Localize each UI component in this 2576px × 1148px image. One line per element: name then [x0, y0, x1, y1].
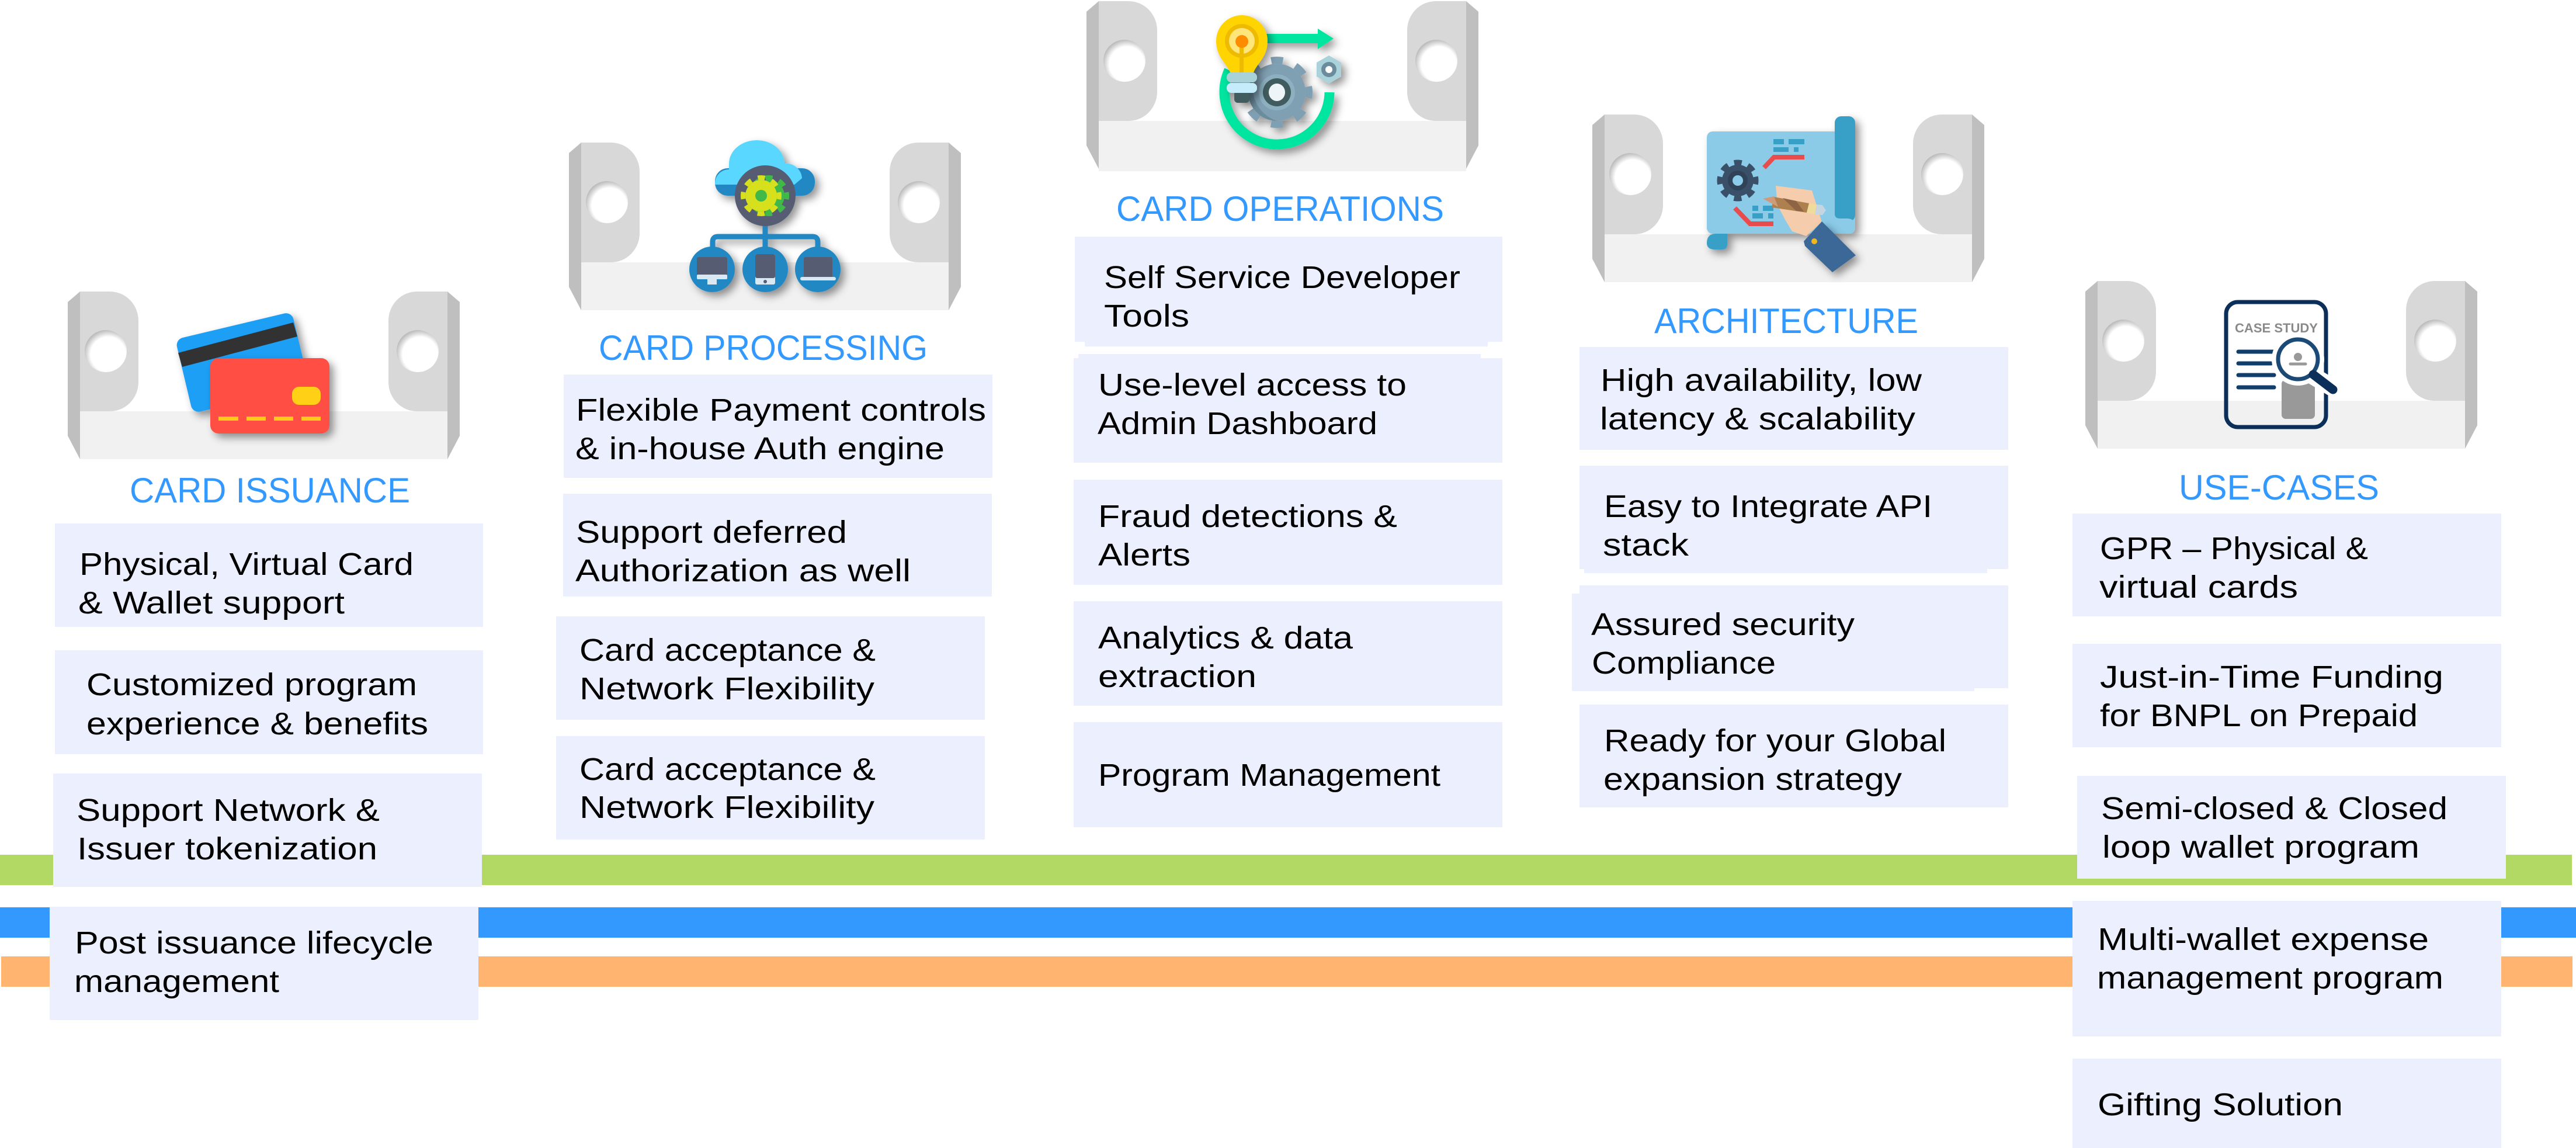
- item: flexible payment controls: [564, 374, 992, 478]
- item: just-in-time funding: for BNPL on Prepaid: [2100, 698, 2418, 733]
- item: global expansion: [1579, 705, 2008, 807]
- item: easy api integration: Easy to Integrate API: [1604, 489, 1932, 524]
- item: developer tools: Self Service Developer: [1104, 260, 1460, 295]
- item: physical, virtual card: [55, 523, 483, 627]
- icon: case study document: [2226, 302, 2333, 427]
- item: deferred authorization: Authorization as well: [575, 553, 911, 588]
- item: admin dashboard: [1074, 354, 1502, 463]
- item: deferred authorization: [563, 494, 992, 596]
- panel: card issuance: [50, 292, 483, 1020]
- icon holder bracket: [1592, 115, 1984, 282]
- item: gpr cards: GPR – Physical &: [2100, 531, 2368, 566]
- icon holder bracket: [569, 143, 961, 310]
- panel: card operations: [1074, 1, 1502, 827]
- item: wallet program: [2077, 776, 2506, 879]
- item: security compliance: [1572, 585, 2008, 691]
- item: card acceptance: [556, 616, 985, 720]
- item: just-in-time funding: [2072, 644, 2501, 747]
- item: tokenization: Support Network &: [77, 793, 380, 828]
- heading: card processing: CARD PROCESSING: [599, 328, 928, 367]
- item: expense management: Multi-wallet expense: [2098, 922, 2429, 957]
- item: gifting solution: Gifting Solution: [2098, 1087, 2343, 1122]
- item: gifting solution: [2072, 1059, 2501, 1148]
- item: high availability: High availability, low: [1601, 363, 1922, 398]
- panel: architecture: [1572, 115, 2008, 807]
- icon holder bracket: [68, 292, 460, 459]
- item: admin dashboard: Use-level access to: [1098, 367, 1407, 403]
- band: green: [0, 855, 2572, 885]
- item: analytics: [1074, 601, 1502, 706]
- heading: card issuance: CARD ISSUANCE: [130, 471, 410, 510]
- item: global expansion: Ready for your Global: [1604, 723, 1946, 758]
- item: customized program: experience & benefits: [86, 706, 428, 741]
- item: card acceptance: Network Flexibility: [579, 671, 874, 706]
- item: developer tools: Tools: [1104, 299, 1189, 334]
- item: card acceptance: Card acceptance &: [579, 633, 876, 668]
- item: high availability: [1579, 347, 2008, 450]
- band: blue: [0, 907, 2576, 938]
- item: expense management: [2072, 901, 2501, 1036]
- item: deferred authorization: Support deferred: [576, 515, 847, 550]
- item: wallet program: Semi-closed & Closed: [2101, 791, 2447, 826]
- item: developer tools: [1075, 237, 1502, 346]
- item: card acceptance repeat: Network Flexibility: [579, 790, 874, 825]
- item: physical, virtual card: & Wallet support: [78, 585, 345, 620]
- icon: credit cards: [175, 311, 329, 433]
- item: flexible payment controls: & in-house Auth engine: [575, 431, 945, 466]
- icon holder bracket: [1086, 1, 1478, 171]
- item: global expansion: expansion strategy: [1603, 762, 1902, 797]
- item: fraud detection: [1074, 480, 1502, 585]
- item: expense management: management program: [2097, 960, 2443, 996]
- item: program management: Program Management: [1098, 758, 1440, 793]
- panel: use-cases: [2072, 281, 2506, 1148]
- item: gpr cards: [2072, 514, 2501, 616]
- panel: card processing: [556, 140, 992, 840]
- item: flexible payment controls: Flexible Payment controls: [576, 393, 986, 428]
- item: tokenization: Issuer tokenization: [77, 831, 377, 866]
- heading: architecture: ARCHITECTURE: [1654, 301, 1918, 341]
- item: physical, virtual card: Physical, Virtual Card: [79, 547, 414, 582]
- item: analytics: extraction: [1098, 659, 1256, 694]
- icon: cloud network: [689, 140, 841, 292]
- item: easy api integration: stack: [1603, 528, 1689, 563]
- item: lifecycle management: Post issuance lifecycle: [75, 925, 433, 960]
- item: security compliance: Compliance: [1592, 646, 1776, 681]
- item: program management: [1074, 722, 1502, 827]
- item: gpr cards: virtual cards: [2099, 570, 2298, 605]
- item: admin dashboard: Admin Dashboard: [1098, 406, 1377, 441]
- item: security compliance: Assured security: [1591, 607, 1855, 642]
- item: lifecycle management: management: [74, 964, 279, 999]
- item: wallet program: loop wallet program: [2102, 830, 2419, 865]
- item: customized program: [55, 650, 483, 754]
- item: customized program: Customized program: [86, 667, 417, 702]
- item: tokenization: [53, 774, 482, 887]
- item: analytics: Analytics & data: [1098, 620, 1353, 655]
- item: just-in-time funding: Just-in-Time Funding: [2100, 660, 2443, 695]
- icon: blueprint and hand: [1707, 116, 1856, 272]
- icon holder bracket: [2085, 281, 2477, 449]
- item: card acceptance repeat: Card acceptance &: [579, 752, 876, 787]
- band: orange: [1, 956, 2572, 987]
- item: lifecycle management: [50, 907, 478, 1020]
- item: high availability: latency & scalability: [1600, 401, 1915, 436]
- heading: use-cases: USE-CASES: [2179, 468, 2379, 507]
- heading: card operations: CARD OPERATIONS: [1116, 189, 1444, 228]
- icon: bulb and gear: [1216, 15, 1341, 144]
- item: fraud detection: Alerts: [1098, 537, 1190, 573]
- item: fraud detection: Fraud detections &: [1098, 499, 1397, 534]
- item: easy api integration: [1579, 466, 2008, 573]
- icon: case study document: CASE STUDY: [2235, 321, 2318, 335]
- item: card acceptance repeat: [556, 736, 985, 840]
